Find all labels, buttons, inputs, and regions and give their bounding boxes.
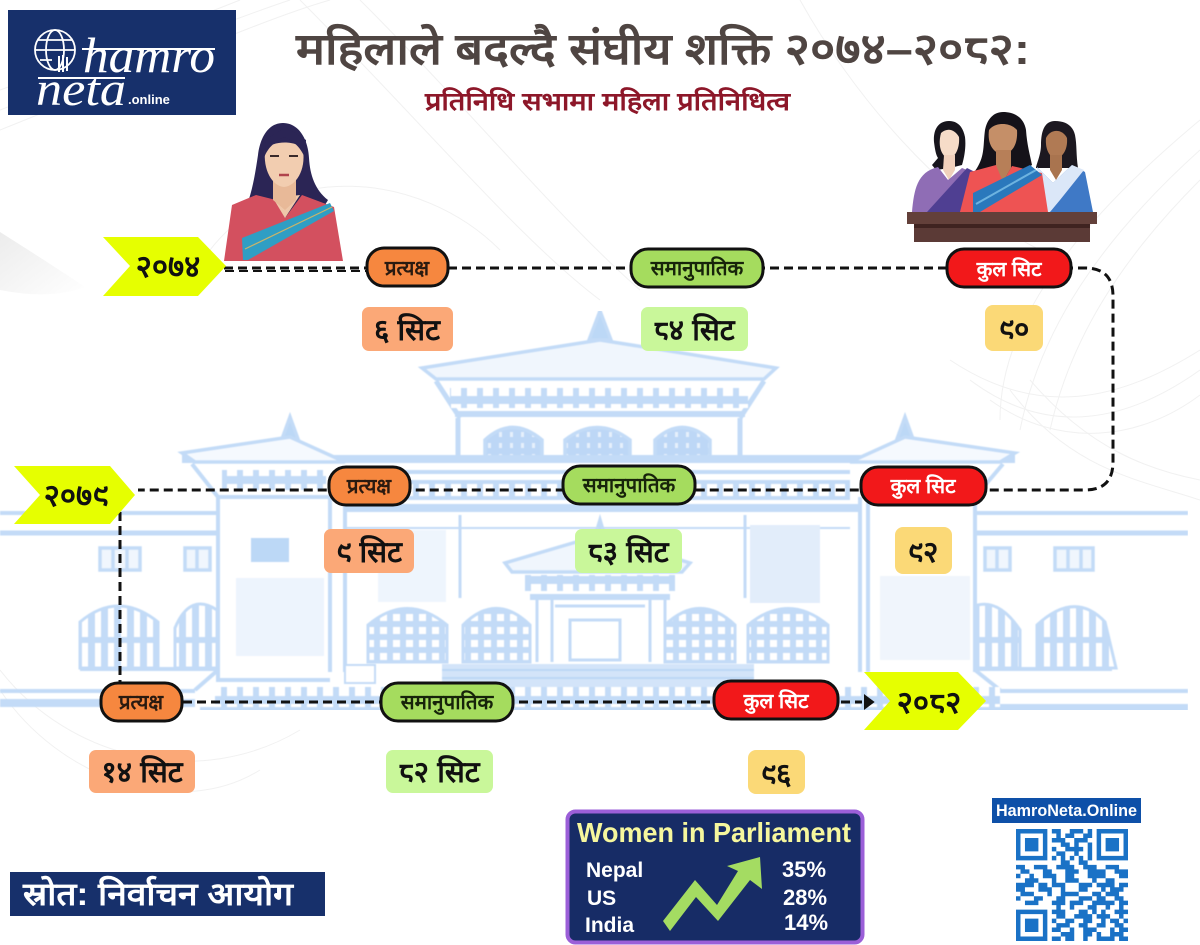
centre tower bbox=[589, 311, 611, 340]
pill direct: प्रत्यक्ष bbox=[346, 475, 392, 498]
logo bbox=[8, 10, 236, 116]
background: parliament building bbox=[0, 311, 1188, 710]
side pavilions bbox=[282, 417, 298, 439]
timeline row 2079 bbox=[14, 466, 986, 574]
year marker 2074 bbox=[103, 237, 226, 296]
country labels: Nepal bbox=[586, 859, 643, 882]
panel heading: Women in Parliament bbox=[577, 817, 851, 848]
arrowhead bbox=[865, 696, 873, 708]
year marker 2079 bbox=[14, 466, 135, 524]
icon: globe bbox=[35, 30, 75, 72]
timeline row 2082 bbox=[89, 672, 986, 794]
percent values: 14% bbox=[784, 910, 828, 935]
pill direct bbox=[101, 683, 182, 721]
value 6 bbox=[362, 307, 453, 351]
value 84: ८४ सिट bbox=[653, 313, 736, 347]
country labels: India bbox=[585, 914, 634, 937]
value 14 bbox=[89, 750, 195, 793]
percent values bbox=[782, 857, 828, 935]
logo suffix: .online bbox=[128, 92, 170, 107]
pill total: कुल सिट bbox=[976, 257, 1043, 282]
value 92 bbox=[895, 527, 952, 574]
pill total bbox=[714, 681, 838, 719]
country labels: US bbox=[587, 887, 616, 910]
value 84 bbox=[641, 307, 748, 351]
value 90: ९० bbox=[999, 313, 1029, 346]
main cornice bbox=[182, 455, 1015, 463]
percent values: 28% bbox=[783, 885, 827, 910]
value 9: ९ सिट bbox=[336, 535, 403, 569]
percent values: 35% bbox=[782, 857, 826, 882]
QR label: HamroNeta.Online bbox=[996, 801, 1137, 820]
pill direct bbox=[329, 467, 410, 505]
pill proportional: समानुपातिक bbox=[400, 690, 495, 715]
pill direct: प्रत्यक्ष bbox=[384, 257, 430, 280]
panel: women in parliament bbox=[568, 812, 862, 942]
pill total bbox=[861, 467, 986, 505]
pill proportional: समानुपातिक bbox=[650, 256, 745, 281]
value 83: ८३ सिट bbox=[587, 535, 670, 569]
base and steps bbox=[80, 667, 1112, 671]
illustration: woman leader bbox=[224, 123, 343, 261]
logo wordmark rules bbox=[38, 49, 215, 78]
value 92: ९२ bbox=[908, 536, 938, 569]
value 82: ८२ सिट bbox=[398, 755, 481, 789]
timeline row 2074 bbox=[103, 237, 1071, 351]
country labels bbox=[585, 859, 643, 937]
value 83 bbox=[575, 529, 682, 573]
year marker 2082 bbox=[864, 672, 986, 730]
value 96: ९६ bbox=[761, 758, 791, 791]
porch bbox=[594, 520, 606, 540]
value 82 bbox=[386, 750, 493, 793]
subtitle: प्रतिनिधि सभामा महिला प्रतिनिधित्व bbox=[424, 87, 791, 116]
pill proportional bbox=[563, 466, 695, 504]
source box: स्रोत: निर्वाचन आयोग bbox=[22, 875, 294, 912]
pill direct: प्रत्यक्ष bbox=[118, 691, 164, 714]
value 6: ६ सिट bbox=[374, 313, 441, 347]
QR code bbox=[1016, 829, 1128, 941]
pill proportional bbox=[381, 683, 513, 721]
value 96 bbox=[748, 750, 805, 794]
podium bbox=[907, 212, 1097, 242]
pill total: कुल सिट bbox=[890, 474, 957, 499]
year marker 2074: २०७४ bbox=[136, 249, 200, 284]
value 90 bbox=[985, 305, 1043, 351]
title: महिलाले बदल्दै संघीय शक्ति २०७४–२०८२: bbox=[295, 23, 1030, 74]
pill direct bbox=[367, 248, 448, 286]
logo wordmark: neta: neta bbox=[36, 63, 126, 116]
pill total: कुल सिट bbox=[743, 689, 810, 714]
timeline dashed path bbox=[120, 268, 1113, 702]
pill total bbox=[947, 249, 1071, 287]
arched windows bbox=[80, 604, 1116, 668]
small windows bbox=[100, 548, 1093, 570]
icon: rising arrow bbox=[663, 857, 762, 931]
pill proportional: समानुपातिक bbox=[582, 473, 677, 498]
illustration: three women at podium bbox=[907, 112, 1097, 242]
value 9 bbox=[324, 529, 414, 573]
year marker 2079: २०७९ bbox=[44, 478, 108, 513]
pill proportional bbox=[631, 249, 763, 287]
pale panels bbox=[236, 578, 324, 656]
logo wordmark: hamro: hamro bbox=[83, 27, 215, 83]
source box bbox=[10, 872, 325, 916]
wing bands bbox=[0, 511, 1188, 515]
value 14: १४ सिट bbox=[101, 755, 184, 789]
year marker 2082: २०८२ bbox=[897, 685, 961, 720]
